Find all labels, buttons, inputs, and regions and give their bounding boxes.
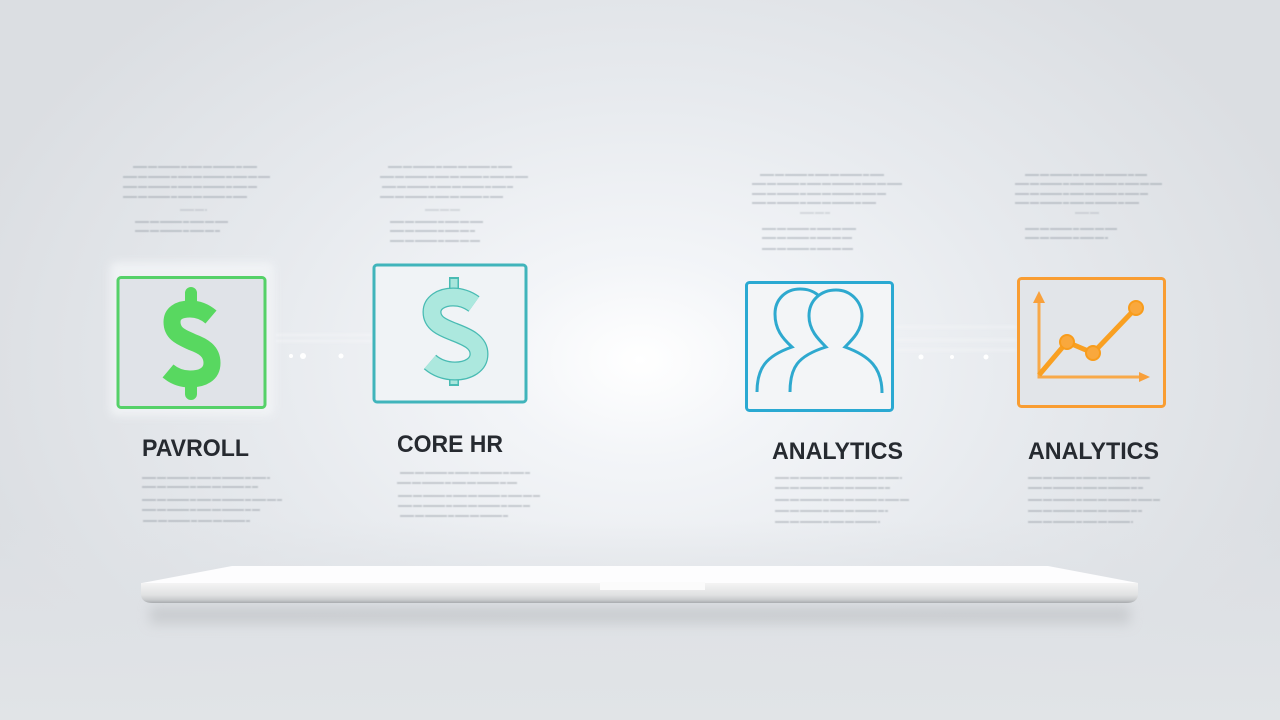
device notch <box>600 582 705 590</box>
connector: analytics to analytics <box>896 327 1016 360</box>
icon: teal dollar card <box>374 265 526 402</box>
device shadow <box>150 606 1130 624</box>
icon: orange chart card <box>1018 278 1164 406</box>
panel: analytics chart <box>1015 175 1164 522</box>
panel: payroll <box>110 167 282 521</box>
text block: analytics people upper description <box>752 175 902 249</box>
text block: analytics people lower description <box>775 478 910 522</box>
text block: analytics chart upper description <box>1015 175 1162 238</box>
text block: payroll lower description <box>142 478 282 521</box>
panel: analytics people <box>746 175 910 522</box>
device front edge <box>141 583 1138 603</box>
connector: payroll to core HR <box>276 335 372 359</box>
text block: core HR upper description <box>380 167 528 241</box>
heading: analytics chart: ANALYTICS <box>1028 438 1159 465</box>
heading: core HR: CORE HR <box>397 431 503 458</box>
heading: analytics people: ANALYTICS <box>772 438 903 465</box>
text block: analytics chart lower description <box>1028 478 1160 522</box>
text block: core HR lower description <box>397 473 540 516</box>
icon: people card <box>746 282 892 410</box>
panel: core HR <box>374 167 540 516</box>
device top surface <box>142 566 1138 583</box>
icon: green dollar card <box>110 262 274 416</box>
text block: payroll upper description <box>123 167 270 231</box>
heading: payroll: PAVROLL <box>142 435 249 462</box>
device: laptop base platform <box>141 566 1138 624</box>
